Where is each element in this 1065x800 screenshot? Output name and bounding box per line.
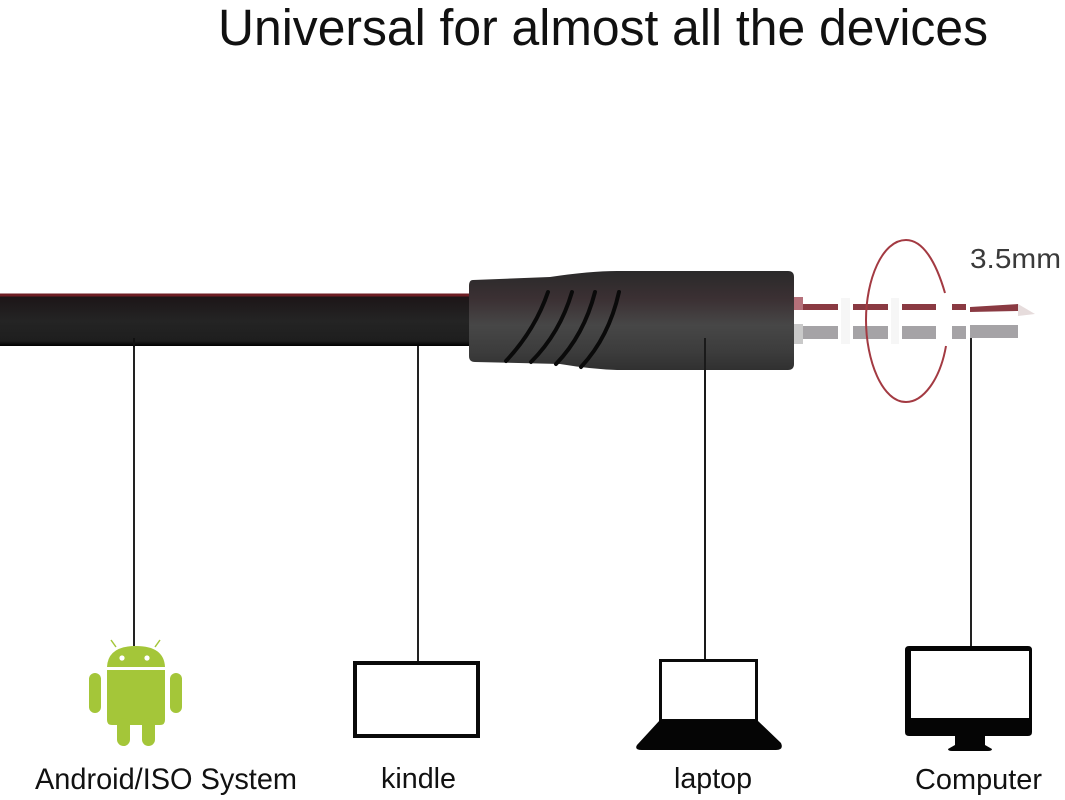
pin: stripes bbox=[794, 297, 899, 344]
icon: computer bbox=[905, 646, 1032, 751]
3.5mm pin bbox=[794, 297, 1035, 344]
plug body bbox=[469, 271, 794, 370]
plug grooves bbox=[506, 292, 619, 367]
icon: laptop bbox=[636, 660, 782, 750]
connector line: laptop bbox=[704, 338, 706, 660]
label: computer: Computer bbox=[915, 764, 1042, 796]
icon: android bbox=[89, 640, 182, 746]
icon: kindle bbox=[355, 663, 478, 736]
cable bbox=[0, 294, 470, 346]
label: android: Android/ISO System bbox=[35, 763, 297, 796]
label: kindle: kindle bbox=[381, 763, 456, 795]
connector line: computer bbox=[970, 338, 972, 647]
title: Universal for almost all the devices bbox=[218, 0, 988, 56]
3.5mm label: 3.5mm bbox=[970, 243, 1061, 274]
connector stub: android bbox=[133, 338, 135, 347]
red ellipse callout bbox=[866, 240, 946, 402]
label: laptop: laptop bbox=[674, 763, 752, 795]
connector line: kindle bbox=[417, 346, 419, 662]
pin: red conductor bbox=[803, 304, 1035, 316]
pin: grey conductor bbox=[803, 325, 1018, 339]
connector line: android bbox=[133, 338, 135, 646]
